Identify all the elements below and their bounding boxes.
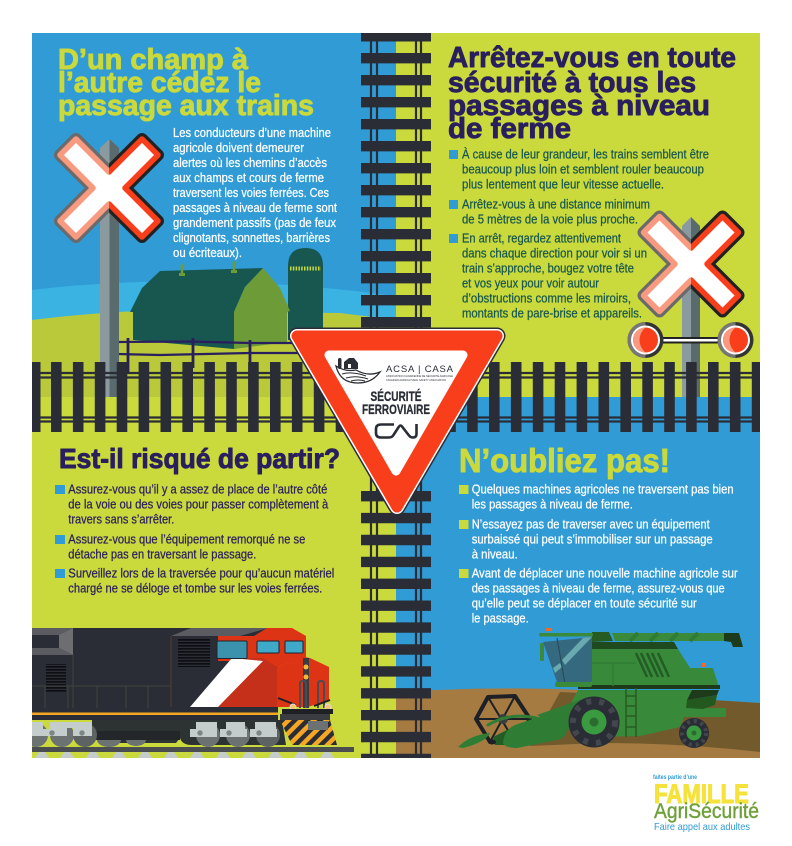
panel: bottom-right bullets: les passages à niveau de ferme. xyxy=(472,496,633,512)
panel: bottom-right bullets: Avant de déplacer une nouvelle machine agricole sur xyxy=(472,566,738,580)
panel: top-right bullets: d’obstructions comme les miroirs, xyxy=(462,290,631,306)
locomotive deck xyxy=(32,708,337,745)
panel: top-left text: clignotants, sonnettes, barrières xyxy=(173,230,330,245)
silo xyxy=(288,248,323,340)
panel: bottom-left bullets: chargé ne se déloge et tombe sur les voies ferrées. xyxy=(68,580,322,596)
railway tracks xyxy=(32,33,760,758)
locomotive undercarriage xyxy=(24,720,286,747)
panel: top-left text: alertes où les chemins d’accès xyxy=(173,155,327,170)
farm scene xyxy=(32,248,396,397)
panel: bottom-right heading: N’oubliez pas! xyxy=(459,442,670,479)
panel: top-right heading: passages à niveau xyxy=(448,90,710,122)
locomotive rail xyxy=(32,747,354,758)
locomotive cab xyxy=(190,628,331,710)
panel: top-right heading xyxy=(448,42,736,145)
panel: bottom-left bullets: de la voie ou des voies pour passer complètement à xyxy=(68,496,329,512)
panel: bottom-right bullets: qu’elle peut se déplacer en toute sécurité sur xyxy=(472,596,697,610)
combine harvester xyxy=(458,628,743,748)
combine wheels xyxy=(568,696,709,748)
panel: top-left text: ou écriteaux). xyxy=(173,245,242,260)
panel: bottom-left bullets: Assurez-vous que l’équipement remorqué ne se xyxy=(68,532,305,546)
brand logo: Famille AgriSécurité: FAMILLE xyxy=(654,779,749,809)
panel: top-left text: passages à niveau de ferme sont xyxy=(173,200,337,215)
ACSA CASA wordmark: ACSA | CASA xyxy=(386,364,454,375)
panel: top-right heading: de ferme xyxy=(448,113,571,145)
panel: bottom-right bullets: des passages à niveau de ferme, assurez-vous que xyxy=(472,580,725,596)
brand logo: Famille AgriSécurité: Faire appel aux adultes xyxy=(654,821,750,833)
panel: bottom-left bullets: Assurez-vous qu’il y a assez de place de l’autre côté xyxy=(68,482,327,496)
combine header and reel xyxy=(458,696,600,748)
locomotive hood xyxy=(32,628,278,710)
panel: bottom-right bullets: N’essayez pas de traverser avec un équipement xyxy=(472,516,710,532)
yield sign xyxy=(297,336,497,507)
CN logo xyxy=(376,424,416,438)
panel: top-right bullets: beaucoup plus loin et semblent rouler beaucoup xyxy=(462,162,704,176)
fence xyxy=(118,338,300,372)
left signal pole xyxy=(100,139,119,397)
combine body xyxy=(570,632,743,737)
right crossbuck sign xyxy=(644,216,738,312)
panel: bottom-right bullets xyxy=(459,482,738,626)
panel: bottom-right bullets: Quelques machines agricoles ne traversent pas bien xyxy=(472,482,734,496)
combine cab xyxy=(539,628,706,687)
panel backgrounds xyxy=(32,33,760,758)
panel: top-left text: agricole doivent demeurer xyxy=(173,140,305,155)
panel: bottom-left bullets xyxy=(55,482,334,596)
panel: top-left heading xyxy=(58,44,314,122)
panel: top-right bullets: de 5 mètres de la voie plus proche. xyxy=(462,212,638,226)
crossing lights xyxy=(628,322,754,358)
right signal pole xyxy=(682,217,700,397)
panel: top-left text xyxy=(173,125,337,260)
panel: top-right bullets: dans chaque direction pour voir si un xyxy=(462,246,647,260)
panel: top-right bullets: Arrêtez-vous à une distance minimum xyxy=(462,196,650,212)
panel: top-left heading: l’autre cédez le xyxy=(58,67,261,99)
panel: top-right bullets: et vos yeux pour voir autour xyxy=(462,276,600,290)
ACSA CASA wordmark xyxy=(386,364,454,382)
panel: top-left heading: D’un champ à xyxy=(58,44,249,76)
panel: top-right bullets: En arrêt, regardez attentivement xyxy=(462,230,621,246)
left crossbuck sign xyxy=(60,139,158,237)
panel: top-right bullets: montants de pare-brise et appareils. xyxy=(462,306,642,320)
panel: top-right bullets: À cause de leur grandeur, les trains semblent être xyxy=(462,146,709,162)
brand logo: Famille AgriSécurité xyxy=(653,774,759,833)
panel: top-right heading: sécurité à tous les xyxy=(448,67,696,99)
barn xyxy=(130,262,290,349)
panel: bottom-left bullets: Surveillez lors de la traversée pour qu’aucun matériel xyxy=(68,566,334,580)
brand logo: Famille AgriSécurité: AgriSécurité xyxy=(654,800,759,823)
panel: bottom-left bullets: travers sans s’arrêter. xyxy=(68,512,174,526)
panel: top-right bullets: plus lentement que leur vitesse actuelle. xyxy=(462,176,664,192)
icon: ACSA farm logo xyxy=(336,358,380,383)
panel: top-left text: Les conducteurs d’une machine xyxy=(173,125,331,140)
panel: top-right bullets xyxy=(449,146,709,320)
panel: bottom-right bullets: le passage. xyxy=(472,610,529,626)
field ground xyxy=(396,688,760,758)
locomotive illustration xyxy=(24,628,354,758)
panel: top-right heading: Arrêtez-vous en toute xyxy=(448,42,736,74)
panel: bottom-left bullets: détache pas en traversant le passage. xyxy=(68,546,256,562)
panel: top-right bullets: train s’approche, bougez votre tête xyxy=(462,260,634,276)
sign title: FERROVIAIRE xyxy=(362,402,430,417)
panel: bottom-left heading: Est-il risqué de partir? xyxy=(59,443,340,474)
panel: top-left text: traversent les voies ferrées. Ces xyxy=(173,185,329,200)
panel: top-left heading: passage aux trains xyxy=(58,90,314,122)
ACSA CASA wordmark: ASSOCIATION CANADIENNE DE SÉCURITÉ AGRICOLE xyxy=(386,373,453,378)
panel: bottom-right bullets: surbaissé qui peut s’immobiliser sur un passage xyxy=(472,532,713,546)
ACSA CASA wordmark: CANADIAN AGRICULTURAL SAFETY ASSOCIATION xyxy=(386,378,446,382)
panel: bottom-right bullets: à niveau. xyxy=(472,546,518,562)
sign title: SÉCURITÉ xyxy=(370,389,422,404)
panel: top-left text: aux champs et cours de ferme xyxy=(173,170,324,185)
panel: top-left text: grandement passifs (pas de feux xyxy=(173,215,336,230)
brand logo: Famille AgriSécurité: faites partie d’une xyxy=(653,774,697,781)
sign title xyxy=(362,389,430,417)
